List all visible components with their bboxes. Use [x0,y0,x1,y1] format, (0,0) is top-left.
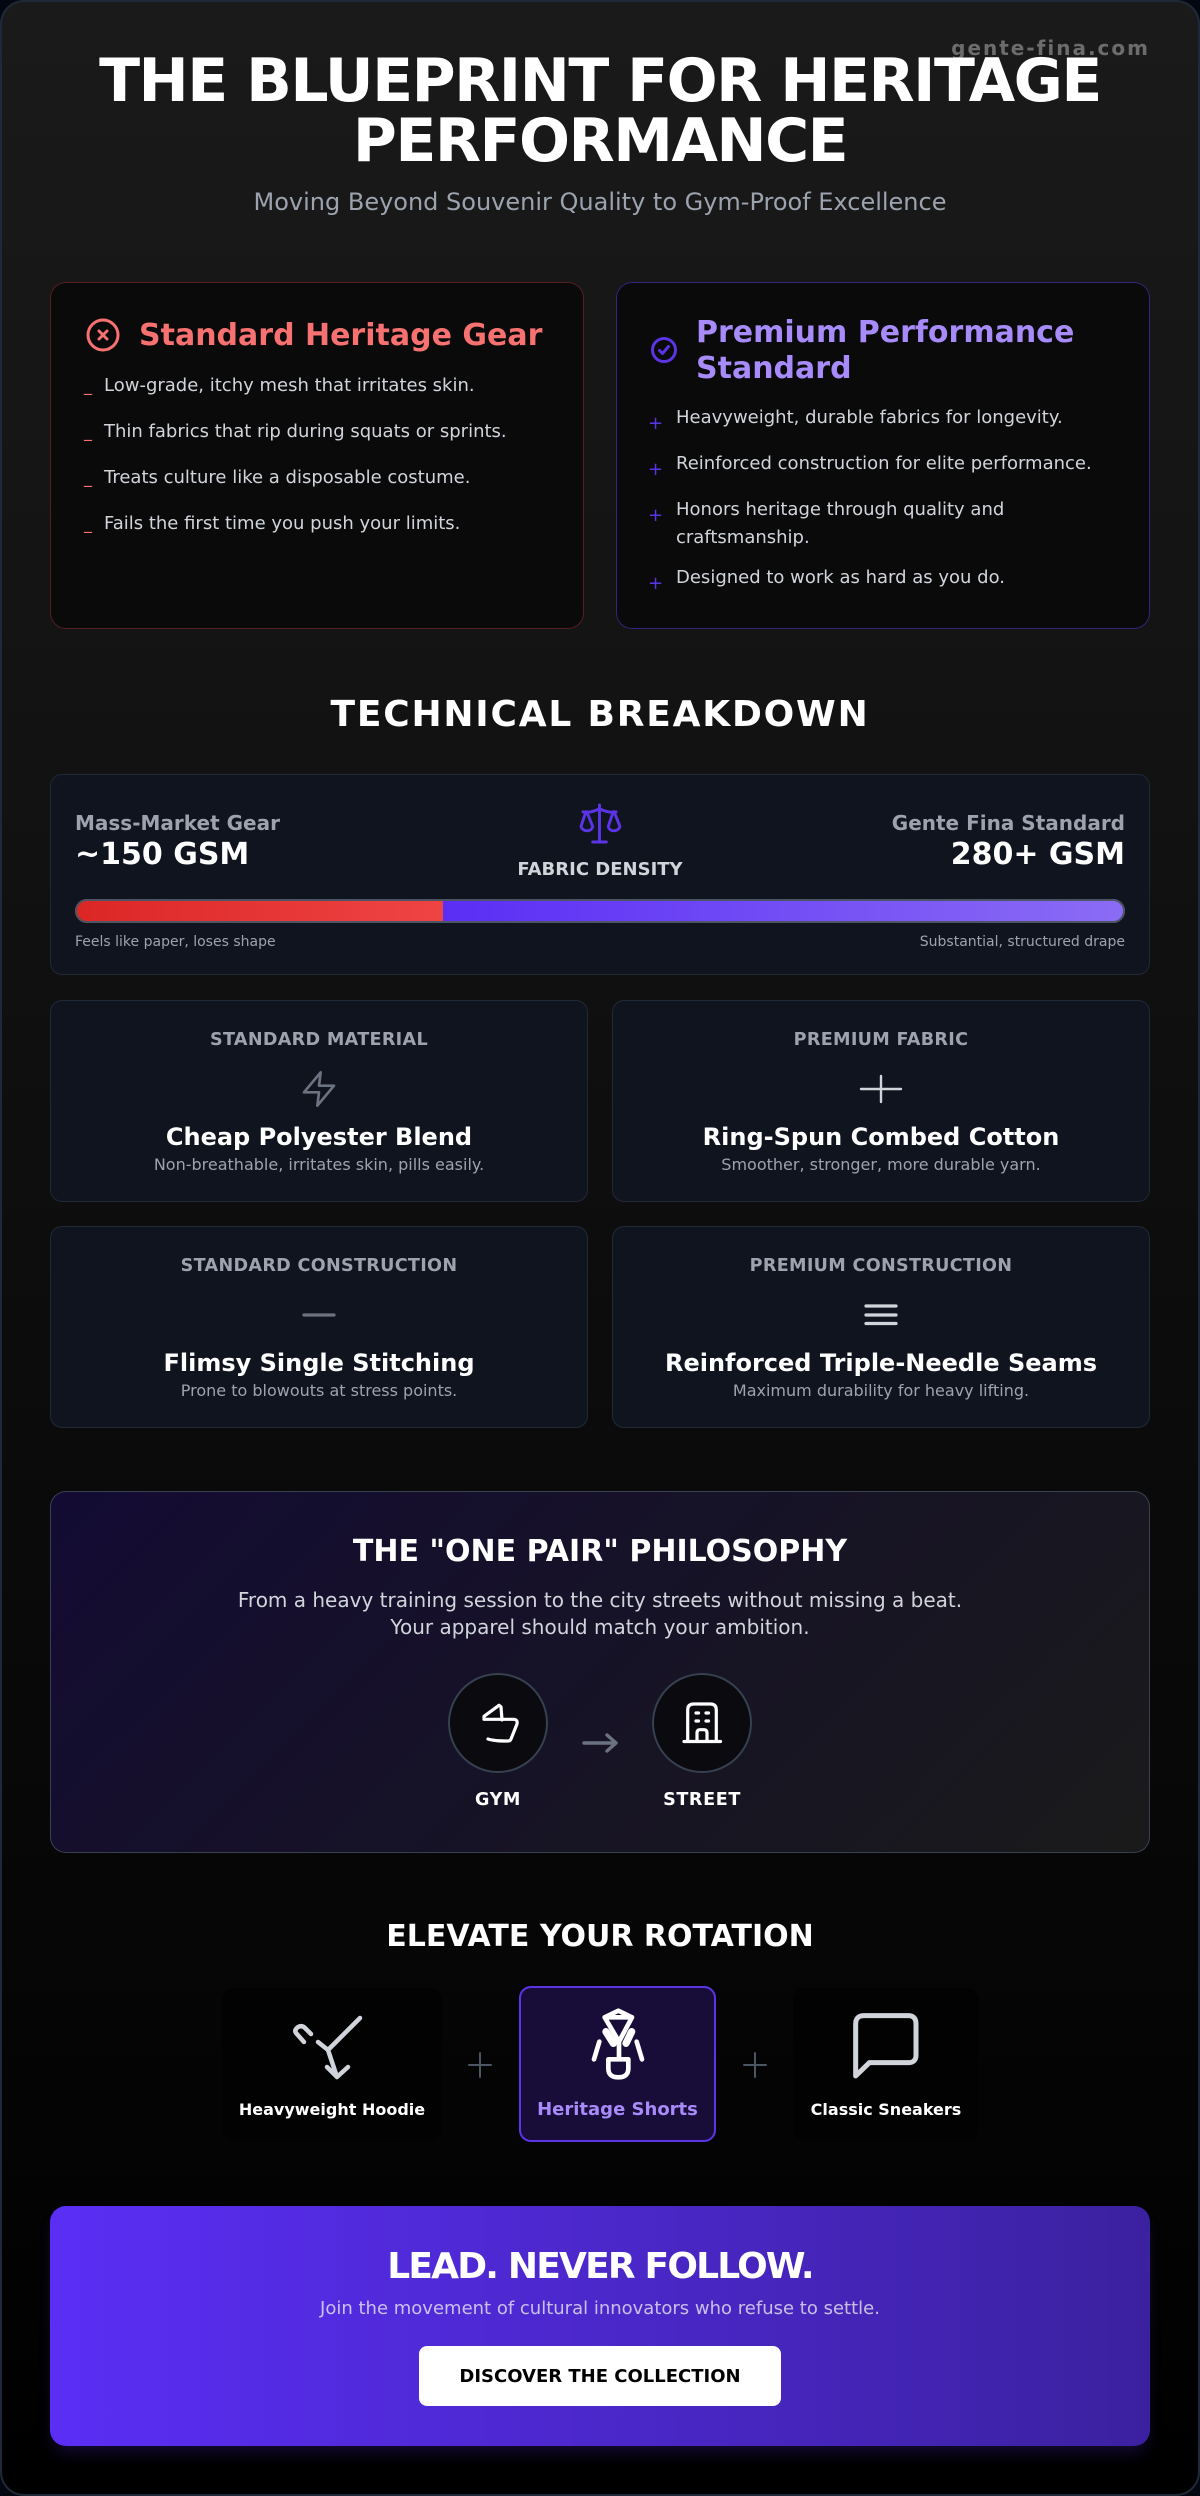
icon: sneakers [853,2013,918,2078]
list: standard gear flaws: Fails the first time you push your limits. [104,513,460,534]
heading: standard gear: Standard Heritage Gear [139,318,542,353]
icon: x circle [86,318,120,352]
title: THE BLUEPRINT FOR HERITAGE [99,46,1101,116]
heading: technical breakdown: TECHNICAL BREAKDOWN [330,694,870,735]
panel: fabric density [50,774,1150,975]
list: standard gear flaws: Low-grade, itchy mesh that irritates skin. [104,375,475,396]
bar: mass-market segment [75,899,442,923]
heading: lead never follow: LEAD. NEVER FOLLOW. [387,2246,813,2287]
card: standard material: Non-breathable, irritates skin, pills easily. [154,1155,484,1174]
list: premium benefits: Reinforced construction for elite performance. [676,453,1092,474]
philosophy text: From a heavy training session to the city streets without missing a beat. [238,1588,962,1612]
mass-market label: Mass-Market Gear [75,811,280,835]
list: premium benefits: Heavyweight, durable fabrics for longevity. [676,407,1063,428]
watermark: gente-fina.com [951,36,1150,60]
plus sign one [468,2052,492,2078]
list: premium benefits: + [648,505,663,526]
premium caption: Substantial, structured drape [920,934,1125,950]
mass-market caption: Feels like paper, loses shape [75,934,276,950]
list: premium benefits: + [648,573,663,594]
card: standard construction: Prone to blowouts at stress points. [181,1381,457,1400]
list: premium benefits: + [648,459,663,480]
card: premium construction: Reinforced Triple-Needle Seams [665,1349,1097,1377]
card: standard material: STANDARD MATERIAL [210,1030,428,1050]
button: discover the collection: DISCOVER THE COLLECTION [459,2366,741,2387]
card: standard material: Cheap Polyester Blend [166,1123,472,1151]
heading: premium standard [696,315,1074,386]
list: premium benefits [648,407,1092,594]
list: standard gear flaws: Treats culture like a disposable costume. [104,467,470,488]
title: PERFORMANCE [353,106,847,176]
label: sneakers: Classic Sneakers [811,2100,961,2119]
premium label: Gente Fina Standard [892,811,1125,835]
cta subtext: Join the movement of cultural innovators who refuse to settle. [320,2298,880,2319]
card: premium fabric [612,1000,1150,1202]
gym label: GYM [475,1790,521,1810]
card: standard construction: Flimsy Single Stitching [163,1349,475,1377]
card: premium construction [612,1226,1150,1428]
icon: minus [302,1313,336,1317]
mass-market value: ~150 GSM [75,837,249,872]
icon: triple lines [864,1304,898,1326]
button: discover the collection [419,2346,781,2406]
list: premium benefits: Honors heritage through quality and [676,499,1004,520]
icon: hoodie [293,2016,362,2080]
list: premium benefits: + [648,413,663,434]
philosophy text [238,1588,962,1639]
card: standard construction: STANDARD CONSTRUCTION [181,1256,457,1276]
arrow: gym to street [582,1733,618,1753]
panel: one pair philosophy [50,1491,1150,1853]
list: standard gear flaws: _ [84,422,92,441]
list: standard gear flaws [84,375,507,534]
icon: plus [860,1074,902,1104]
icon: street [652,1673,752,1773]
list: standard gear flaws: Thin fabrics that rip during squats or sprints. [104,421,507,442]
card: standard construction [50,1226,588,1428]
heading: one pair: THE "ONE PAIR" PHILOSOPHY [353,1534,847,1569]
label: shorts: Heritage Shorts [537,2099,698,2120]
fabric density label: FABRIC DENSITY [517,859,683,880]
subtitle: Moving Beyond Souvenir Quality to Gym-Proof Excellence [254,188,946,216]
density bar [75,899,1125,923]
icon: scale [580,804,622,844]
icon: shorts [592,2008,644,2080]
panel: standard heritage gear [50,282,584,629]
item: classic sneakers [793,1988,979,2140]
list: standard gear flaws: _ [84,376,92,395]
icon: check circle [651,337,677,363]
item: heritage shorts [519,1986,716,2142]
card: premium construction: Maximum durability for heavy lifting. [733,1381,1029,1400]
list: standard gear flaws: _ [84,468,92,487]
card: premium fabric: PREMIUM FABRIC [794,1030,968,1050]
panel: call to action [50,2206,1150,2446]
heading: elevate your rotation: ELEVATE YOUR ROTATION [386,1919,814,1954]
icon: lightning [302,1071,336,1107]
card: premium fabric: Ring-Spun Combed Cotton [703,1123,1059,1151]
plus sign two [743,2052,767,2078]
bar: outline [75,899,1125,923]
item: heavyweight hoodie [222,1988,442,2140]
card: premium construction: PREMIUM CONSTRUCTION [750,1256,1012,1276]
philosophy text: Your apparel should match your ambition. [390,1615,810,1639]
panel: premium performance standard [616,282,1150,629]
list: standard gear flaws: _ [84,514,92,533]
premium value: 280+ GSM [951,837,1125,872]
card: premium fabric: Smoother, stronger, more durable yarn. [721,1155,1041,1174]
icon: gym [448,1673,548,1773]
label: hoodie: Heavyweight Hoodie [239,2100,425,2119]
title [99,46,1101,176]
heading: premium standard: Standard [696,351,852,386]
street label: STREET [663,1790,741,1810]
card: standard material [50,1000,588,1202]
list: premium benefits: craftsmanship. [676,527,810,548]
list: premium benefits: Designed to work as hard as you do. [676,567,1005,588]
bar: premium segment [442,899,1125,923]
heading: premium standard: Premium Performance [696,315,1074,350]
